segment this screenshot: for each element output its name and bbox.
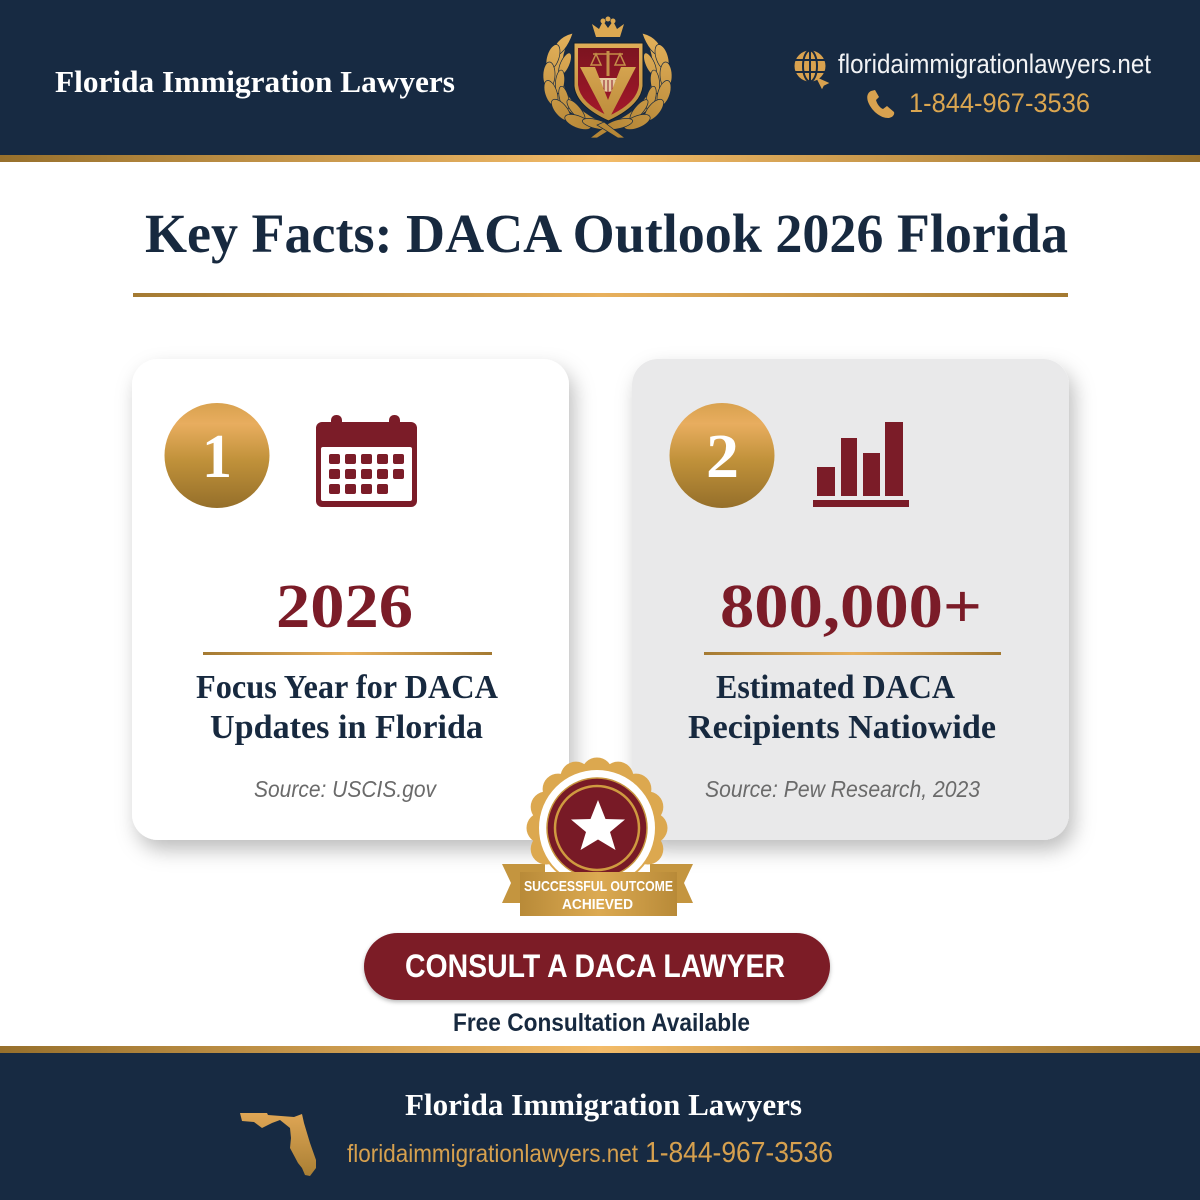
icon: laurel left — [541, 33, 618, 138]
description: Recipients Natiowide — [688, 709, 996, 746]
description — [688, 669, 996, 746]
ribbon banner — [520, 872, 677, 916]
header firm name: Florida Immigration Lawyers — [55, 64, 455, 99]
number badge 1: 1 — [202, 423, 232, 491]
header phone with handset icon — [867, 88, 1090, 118]
icon: Florida map — [240, 1113, 316, 1176]
number badge 2 — [670, 403, 774, 508]
panel: card 2 — [632, 359, 1069, 840]
icon: star — [571, 800, 625, 850]
number badge 2: 2 — [706, 423, 739, 491]
logo: crest with laurel wreath — [541, 16, 674, 138]
icon: globe — [794, 50, 827, 87]
seal: successful outcome achieved — [502, 757, 693, 916]
icon: letter V — [580, 67, 636, 117]
footer website: floridaimmigrationlawyers.net — [347, 1140, 638, 1168]
banner text: ACHIEVED — [562, 896, 633, 913]
banner text — [524, 878, 673, 913]
website text: floridaimmigrationlawyers.net — [838, 49, 1151, 79]
button: call to action — [364, 933, 830, 1000]
medallion rings — [539, 770, 655, 886]
button: call to action: CONSULT A DACA LAWYER — [405, 948, 785, 984]
title underline — [133, 293, 1068, 297]
free consultation note: Free Consultation Available — [453, 1009, 750, 1037]
header website with globe icon — [794, 49, 1151, 87]
title: Key Facts: DACA Outlook 2026 Florida — [145, 203, 1068, 264]
icon: bar chart — [813, 422, 909, 507]
footer firm name: Florida Immigration Lawyers — [405, 1087, 802, 1122]
stat divider — [203, 652, 492, 655]
icon: laurel right — [597, 33, 674, 138]
footer phone: 1-844-967-3536 — [645, 1137, 833, 1169]
header band — [0, 0, 1200, 162]
description — [196, 669, 498, 746]
source: Source: Pew Research, 2023 — [705, 776, 980, 802]
banner text: SUCCESSFUL OUTCOME — [524, 878, 673, 895]
number badge 1 — [164, 403, 270, 508]
icon: crown — [592, 16, 624, 37]
ribbon tails — [502, 864, 693, 903]
source: Source: USCIS.gov — [254, 776, 437, 802]
scalloped rosette — [526, 757, 668, 888]
statistic 2026: 2026 — [276, 573, 413, 641]
stat divider — [704, 652, 1001, 655]
phone number: 1-844-967-3536 — [909, 88, 1090, 118]
description: Focus Year for DACA — [196, 669, 498, 706]
statistic 800,000+: 800,000+ — [720, 573, 982, 641]
panel: card 1 — [132, 359, 569, 840]
description: Estimated DACA — [716, 669, 955, 706]
icon: scales of justice — [591, 51, 625, 76]
icon: capitol — [596, 78, 621, 92]
description: Updates in Florida — [210, 709, 483, 746]
footer band — [0, 1046, 1200, 1200]
icon: calendar — [316, 415, 417, 507]
icon: shield — [574, 43, 643, 121]
icon: phone — [867, 90, 894, 118]
